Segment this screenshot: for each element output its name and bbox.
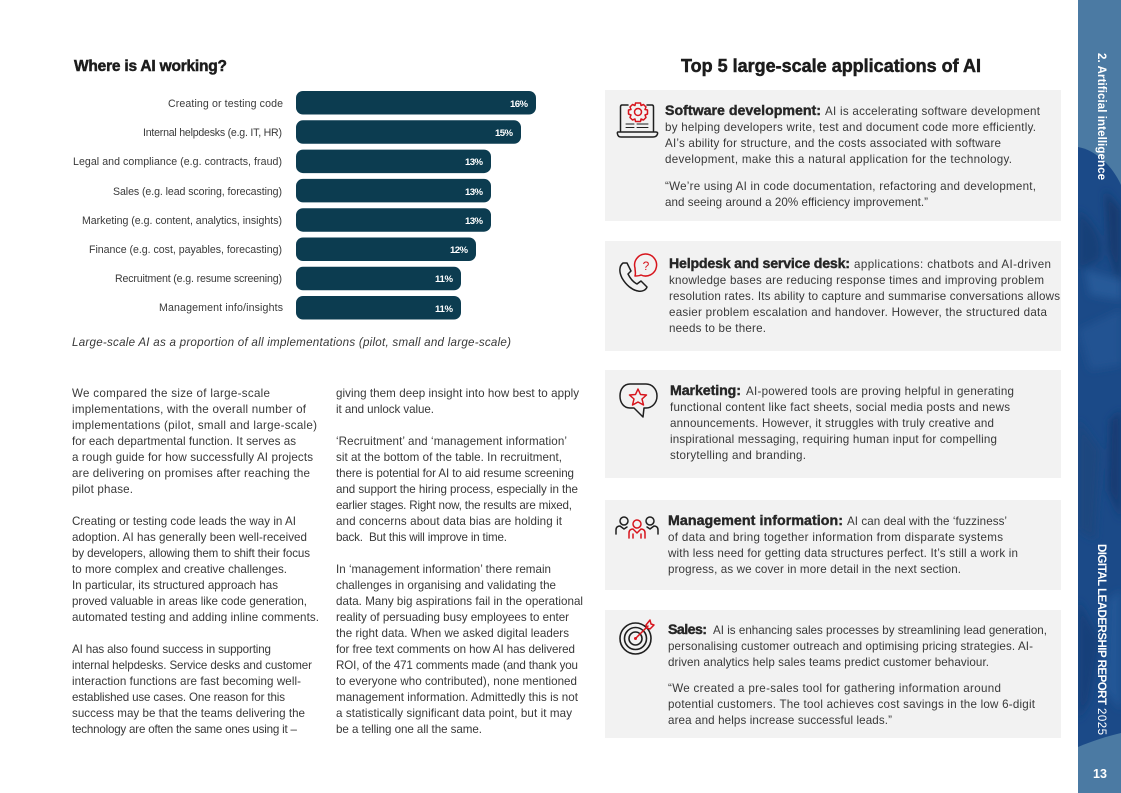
text: needs to be there. bbox=[669, 322, 766, 335]
sidebar section label: 2. Artificial intelligence bbox=[1095, 53, 1107, 180]
body text: right column bbox=[336, 387, 583, 736]
text: applications: chatbots and AI-driven bbox=[854, 258, 1051, 271]
sidebar report title: 2025 bbox=[1095, 708, 1107, 735]
text: of data and bring together information from disparate systems bbox=[668, 531, 1003, 544]
bar: recruitment: 11% bbox=[435, 274, 453, 285]
text: and seeing around a 20% efficiency improvement.” bbox=[665, 196, 928, 209]
body text: left column: implementations, with the overall number of bbox=[72, 403, 307, 416]
body text: left column bbox=[72, 387, 319, 736]
text: Sales: bbox=[668, 622, 707, 638]
bar: sales: Sales (e.g. lead scoring, forecasting) bbox=[113, 186, 282, 198]
body text: left column: internal helpdesks. Service desks and customer bbox=[72, 659, 312, 672]
body text: left column: adoption. AI has generally been well-received bbox=[72, 531, 307, 544]
text: Management information: bbox=[668, 513, 843, 529]
body text: left column: Creating or testing code leads the way in AI bbox=[72, 515, 296, 528]
text: functional content like fact sheets, social media posts and news bbox=[670, 401, 1010, 414]
bar: management info bbox=[159, 296, 461, 320]
icon: laptop with gear bbox=[617, 103, 658, 137]
body text: left column: interaction functions are fast becoming well- bbox=[72, 675, 301, 688]
bar: finance: 12% bbox=[450, 245, 468, 256]
panel: sales bbox=[605, 610, 1061, 738]
bar: sales: 13% bbox=[465, 187, 483, 198]
icon: three people bbox=[616, 517, 658, 538]
bar: legal and compliance bbox=[73, 150, 491, 173]
bar: sales bbox=[113, 179, 491, 202]
body text: left column: success may be that the teams delivering the bbox=[72, 707, 305, 720]
bar: marketing: 13% bbox=[465, 216, 483, 227]
bar: internal helpdesks: Internal helpdesks (e.g. IT, HR) bbox=[143, 127, 282, 139]
heading: top 5 applications: Top 5 large-scale applications of AI bbox=[681, 56, 981, 76]
body text: left column: established use cases. One reason for this bbox=[72, 691, 285, 704]
heading: where is AI working: Where is AI working? bbox=[74, 58, 227, 75]
body text: right column: be a telling one all the same. bbox=[336, 723, 482, 736]
bar: legal and compliance: Legal and compliance (e.g. contracts, fraud) bbox=[73, 156, 282, 168]
text: knowledge bases are reducing response times and improving problem bbox=[669, 274, 1044, 287]
text: inspirational messaging, requiring human input for compelling bbox=[670, 433, 997, 446]
bar: management info: Management info/insights bbox=[159, 302, 283, 314]
body text: left column: proved valuable in areas like code generation, bbox=[72, 595, 307, 608]
icon: phone with question bubble bbox=[620, 254, 657, 291]
body text: right column: it and unlock value. bbox=[336, 403, 434, 416]
text: driven analytics help sales teams predict customer behaviour. bbox=[668, 656, 989, 669]
text: area and helps increase successful leads.” bbox=[668, 714, 892, 727]
body text: left column: AI has also found success in supporting bbox=[72, 643, 271, 656]
text: by helping developers write, test and document code more efficiently. bbox=[665, 121, 1036, 134]
body text: left column: In particular, its structured approach has bbox=[72, 579, 278, 592]
bar: marketing bbox=[82, 208, 491, 232]
text: with less need for getting data structures perfect. It’s still a work in bbox=[667, 547, 1018, 560]
text bbox=[667, 513, 1018, 576]
sidebar report title: DIGITAL LEADERSHIP REPORT bbox=[1095, 544, 1107, 705]
bar: finance: Finance (e.g. cost, payables, forecasting) bbox=[89, 244, 282, 256]
body text: right column: earlier stages. Right now, the results are mixed, bbox=[336, 499, 572, 512]
body text: right column: giving them deep insight into how best to apply bbox=[336, 387, 579, 400]
bar: internal helpdesks: 15% bbox=[495, 128, 513, 139]
sidebar bbox=[1078, 0, 1121, 793]
body text: right column: ‘Recruitment’ and ‘management information’ bbox=[336, 435, 567, 448]
body text: left column: are delivering on promises after reaching the bbox=[72, 467, 310, 480]
panel: marketing bbox=[605, 370, 1061, 478]
text: Helpdesk and service desk: bbox=[669, 256, 850, 272]
text bbox=[669, 256, 1060, 335]
text: AI’s ability for structure, and the costs associated with software bbox=[665, 137, 1001, 150]
body text: right column: reality of persuading busy employees to enter bbox=[336, 611, 569, 624]
chart caption: Large-scale AI as a proportion of all implementations (pilot, small and large-scale) bbox=[72, 336, 511, 349]
body text: right column: sit at the bottom of the table. In recruitment, bbox=[336, 451, 562, 464]
bar: recruitment bbox=[115, 267, 461, 290]
icon: phone with question bubble: ? bbox=[643, 259, 650, 273]
bar: creating or testing code bbox=[168, 91, 536, 114]
body text: left column: pilot phase. bbox=[72, 483, 133, 496]
text: easier problem escalation and handover. However, the structured data bbox=[669, 306, 1048, 319]
body text: left column: automated testing and adding inline comments. bbox=[72, 611, 319, 624]
panel: management information bbox=[605, 500, 1061, 590]
bar: recruitment: Recruitment (e.g. resume screening) bbox=[115, 273, 282, 285]
body text: right column: a statistically significant data point, but it may bbox=[336, 707, 572, 720]
text: AI is accelerating software development bbox=[825, 105, 1041, 118]
bar: legal and compliance: 13% bbox=[465, 157, 483, 168]
text: development, make this a natural application for the technology. bbox=[665, 153, 1012, 166]
text: potential customers. The tool achieves cost savings in the low 6-digit bbox=[668, 698, 1036, 711]
panel: software development bbox=[605, 90, 1061, 221]
text: Marketing: bbox=[670, 383, 741, 399]
body text: right column: data. Many big aspirations fail in the operational bbox=[336, 595, 583, 608]
text: announcements. However, it struggles with truly creative and bbox=[670, 417, 994, 430]
body text: right column: and concerns about data bias are holding it bbox=[336, 515, 563, 528]
text: resolution rates. Its ability to capture and summarise conversations allows bbox=[669, 290, 1060, 303]
text bbox=[668, 622, 1047, 727]
text: AI-powered tools are proving helpful in generating bbox=[746, 385, 1014, 398]
bar chart bbox=[73, 91, 536, 320]
body text: right column: for free text comments on how AI has delivered bbox=[336, 643, 575, 656]
body text: left column: a rough guide for how successfully AI projects bbox=[72, 451, 313, 464]
icon: target with arrow bbox=[620, 620, 654, 654]
bar: marketing: Marketing (e.g. content, analytics, insights) bbox=[82, 215, 282, 227]
body text: left column: to more complex and creative challenges. bbox=[72, 563, 287, 576]
bar: finance bbox=[89, 238, 476, 261]
text bbox=[665, 103, 1041, 209]
body text: left column: implementations (pilot, small and large-scale) bbox=[72, 419, 317, 432]
body text: right column: ROI, of the 471 comments made (and thank you bbox=[336, 659, 578, 672]
body text: right column: management information. Admittedly this is not bbox=[336, 691, 579, 704]
text: AI can deal with the ‘fuzziness’ bbox=[847, 515, 1007, 528]
bar: creating or testing code: 16% bbox=[510, 99, 528, 110]
body text: right column: In ‘management information’ there remain bbox=[336, 563, 551, 576]
body text: left column: We compared the size of large-scale bbox=[72, 387, 270, 400]
text: “We’re using AI in code documentation, refactoring and development, bbox=[665, 180, 1036, 193]
body text: left column: by developers, allowing them to shift their focus bbox=[72, 547, 310, 560]
text: AI is enhancing sales processes by streamlining lead generation, bbox=[713, 624, 1047, 637]
body text: right column: and support the hiring process, especially in the bbox=[336, 483, 578, 496]
page number: 13 bbox=[1093, 767, 1107, 781]
body text: right column: the right data. When we asked digital leaders bbox=[336, 627, 569, 640]
body text: right column: to everyone who contributed), none mentioned bbox=[336, 675, 577, 688]
body text: left column: technology are often the same ones using it – bbox=[72, 723, 298, 736]
text: Software development: bbox=[665, 103, 821, 119]
text: storytelling and branding. bbox=[670, 449, 806, 462]
body text: right column: there is potential for AI to aid resume screening bbox=[336, 467, 574, 480]
bar: creating or testing code: Creating or testing code bbox=[168, 98, 283, 110]
bar: management info: 11% bbox=[435, 304, 453, 315]
icon: speech bubble with star bbox=[620, 384, 657, 417]
body text: left column: for each departmental function. It serves as bbox=[72, 435, 296, 448]
text: progress, as we cover in more detail in the next section. bbox=[668, 563, 961, 576]
body text: right column: back. But this will improve in time. bbox=[336, 531, 507, 544]
bar: internal helpdesks bbox=[143, 120, 521, 144]
panel: helpdesk bbox=[605, 241, 1061, 351]
text: “We created a pre-sales tool for gathering information around bbox=[668, 682, 1001, 695]
text bbox=[670, 383, 1014, 462]
text: personalising customer outreach and optimising pricing strategies. AI- bbox=[668, 640, 1033, 653]
body text: right column: challenges in organising and validating the bbox=[336, 579, 556, 592]
